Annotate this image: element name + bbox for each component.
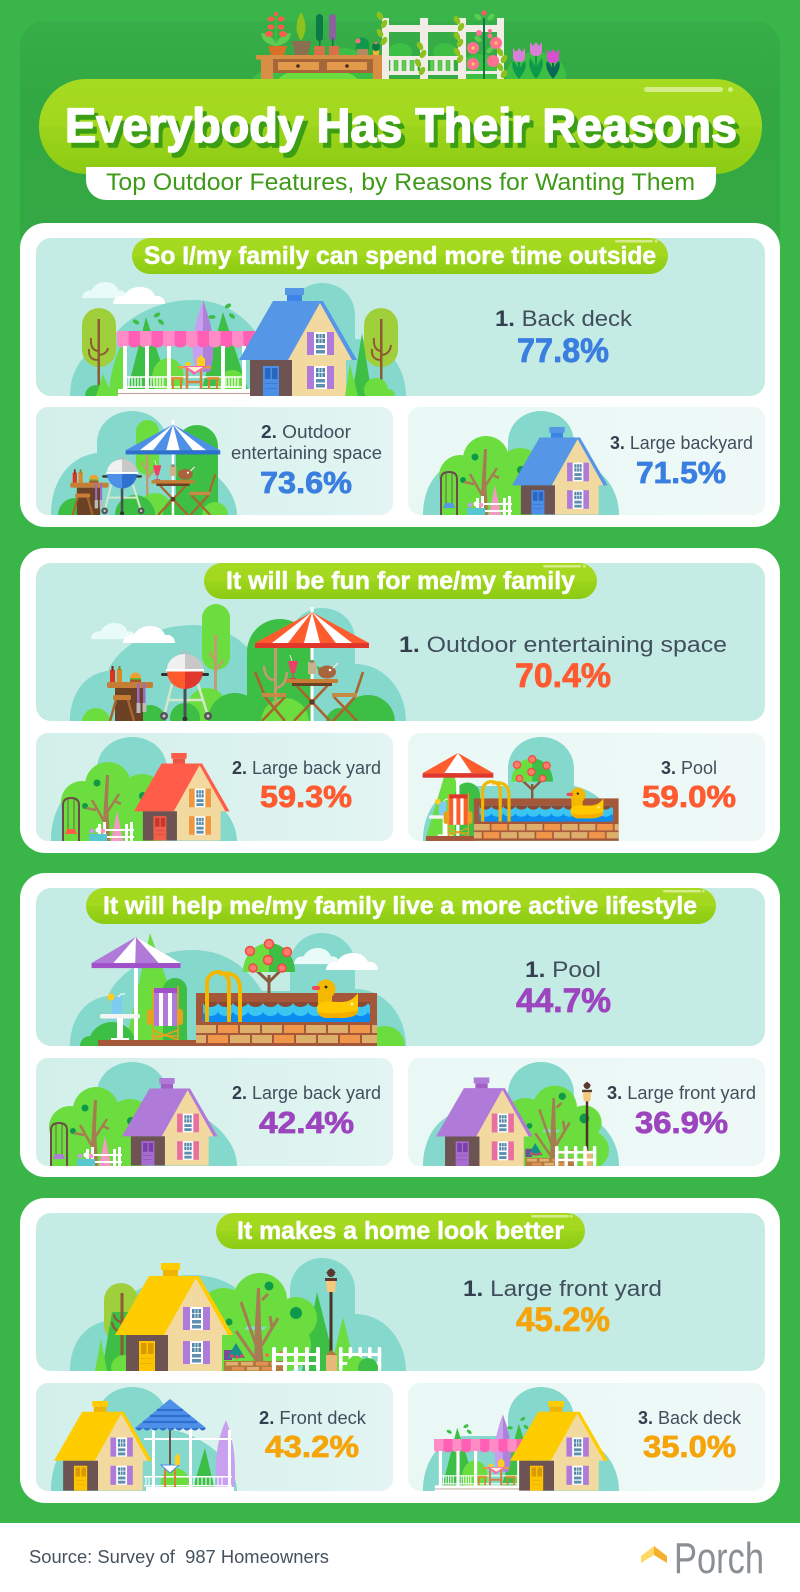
label: 1. Pool: 1. Pool [525, 957, 601, 982]
source note: Source: Survey of 987 Homeowners [29, 1547, 329, 1567]
illustration: front deck with yellow house [51, 1387, 237, 1496]
illustration: back deck with blue house [70, 282, 406, 407]
label: 2. Large back yard: 2. Large back yard [232, 758, 381, 778]
panel: active lifestyle [20, 873, 780, 1177]
illustration: back deck with yellow house [423, 1387, 619, 1493]
subtitle tab: Top Outdoor Features, by Reasons for Wanting Them [106, 169, 695, 196]
illustration: patio with red umbrella and grill [70, 604, 406, 721]
logo: Porch [641, 1534, 764, 1583]
header garden illustration [252, 10, 566, 102]
value: 42.4%: 42.4% [259, 1105, 354, 1140]
footer [0, 1523, 800, 1592]
value: 70.4%: 70.4% [515, 657, 611, 695]
value: 44.7%: 44.7% [516, 982, 611, 1020]
value: 73.6%: 73.6% [260, 465, 352, 500]
title banner [39, 79, 762, 174]
label: 2. Outdoor entertaining space: 2. Outdoor [261, 422, 351, 442]
value: 71.5%: 71.5% [636, 455, 726, 490]
illustration: large back yard with red house [51, 737, 237, 841]
label: 3. Large backyard: 3. Large backyard [610, 433, 753, 453]
heading: home look better [216, 1213, 585, 1249]
value: 43.2%: 43.2% [265, 1429, 359, 1464]
heading: active lifestyle: It will help me/my family live a more active lifestyle [103, 892, 697, 920]
label: 2. Front deck: 2. Front deck [259, 1408, 367, 1428]
illustration: pool with purple umbrella and duck [70, 933, 406, 1046]
illustration: large backyard with blue house [423, 411, 619, 515]
panel: home look better [20, 1198, 780, 1503]
logo: Porch: Porch [674, 1534, 764, 1583]
label: 2. Large back yard: 2. Large back yard [232, 1083, 381, 1103]
title banner: Everybody Has Their Reasons [65, 100, 737, 153]
label: 3. Pool: 3. Pool [661, 758, 717, 778]
illustration: large front yard with purple house [423, 1062, 619, 1169]
panel: spend more time outside [20, 223, 780, 537]
panel: fun for family [20, 548, 780, 853]
value: 77.8%: 77.8% [517, 332, 609, 370]
illustration: patio with blue umbrella [51, 411, 237, 515]
label: 2. Outdoor entertaining space: entertaining space [231, 443, 382, 463]
illustration: pool with red umbrella [423, 737, 619, 841]
label: 3. Back deck: 3. Back deck [638, 1408, 742, 1428]
label: 1. Outdoor entertaining space: 1. Outdoor entertaining space [399, 632, 727, 657]
value: 59.3%: 59.3% [260, 779, 352, 814]
label: 1. Large front yard: 1. Large front yard [463, 1276, 662, 1301]
label: 2. Outdoor entertaining space [231, 422, 382, 463]
title banner: Everybody Has Their Reasons [69, 105, 741, 158]
heading: spend more time outside: So I/my family can spend more time outside [144, 242, 656, 270]
heading: home look better: It makes a home look better [237, 1217, 564, 1245]
value: 59.0%: 59.0% [642, 779, 736, 814]
illustration: large back yard with purple house [49, 1062, 237, 1166]
illustration: front yard with yellow house [70, 1258, 406, 1381]
label: 3. Large front yard: 3. Large front yard [607, 1083, 756, 1103]
value: 45.2%: 45.2% [516, 1301, 610, 1339]
heading: fun for family [204, 563, 597, 599]
label: 1. Back deck: 1. Back deck [495, 306, 633, 331]
heading: fun for family: It will be fun for me/my family [226, 567, 575, 595]
value: 35.0%: 35.0% [643, 1429, 736, 1464]
value: 36.9%: 36.9% [635, 1105, 728, 1140]
